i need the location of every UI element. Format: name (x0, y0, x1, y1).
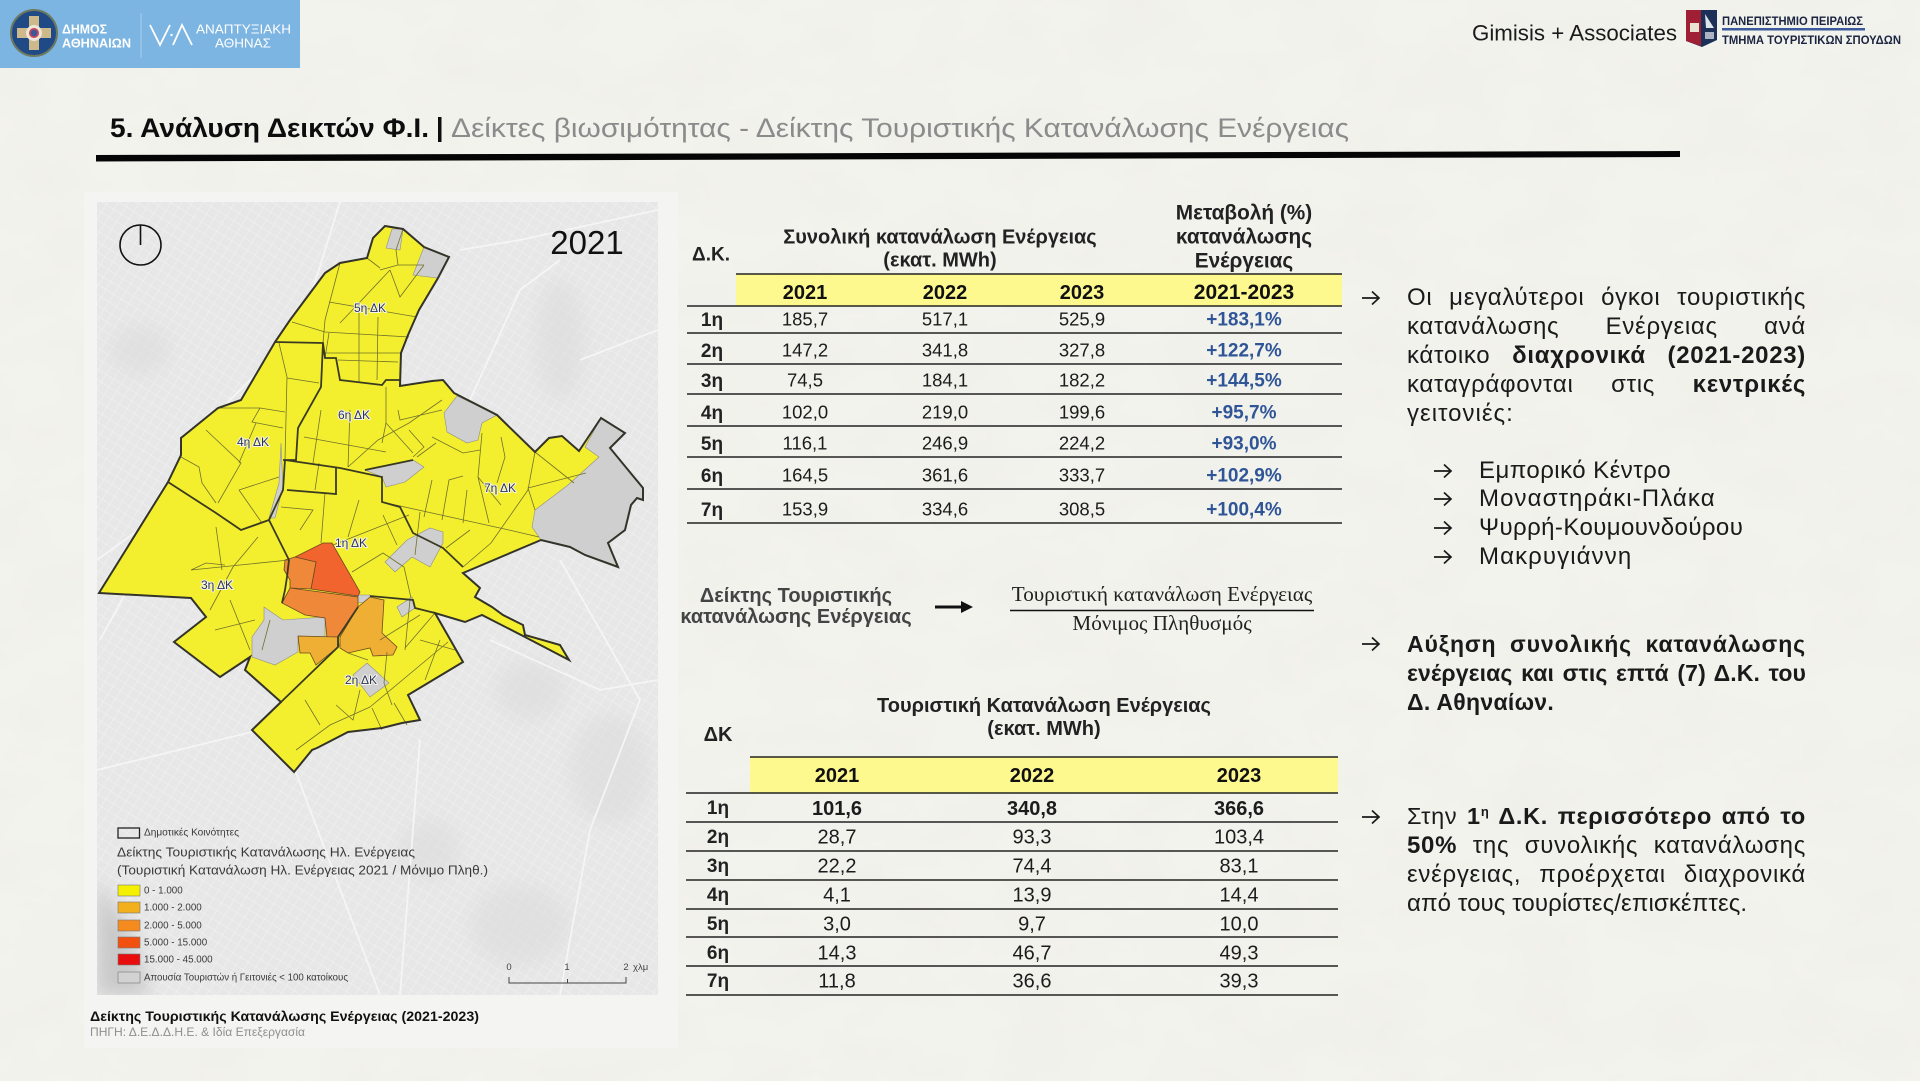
legend: 2.000 - 5.000 (144, 920, 202, 932)
table: total energy consumption: 185,7 (782, 308, 828, 330)
table: total energy consumption: 219,0 (922, 402, 968, 422)
table: total energy consumption: 334,6 (922, 498, 968, 520)
legend: Δείκτης Τουριστικής Κατανάλωσης Ηλ. Ενέργειας (117, 844, 415, 860)
table: total energy consumption: 341,8 (922, 340, 968, 360)
table: tourist energy consumption: 3η (707, 856, 729, 877)
table: tourist energy consumption: 2021 (815, 765, 859, 787)
text block: increase in all seven communities (1407, 631, 1806, 715)
icon: north arrow (120, 225, 161, 265)
table: tourist energy consumption: 366,6 (1214, 798, 1264, 820)
map year: 2021 (550, 224, 624, 261)
table: total energy consumption: 5η (701, 434, 723, 455)
table: total energy consumption: +93,0% (1212, 434, 1277, 454)
logo text: Dimos Athinaion (62, 22, 131, 50)
scale bar: χλμ (633, 962, 648, 973)
table: total energy consumption: 327,8 (1059, 340, 1105, 360)
legend: Απουσία Τουριστών ή Γειτονιές < 100 κατοίκους (144, 972, 348, 984)
table: total energy consumption: 7η (701, 500, 723, 521)
table: tourist energy consumption: 14,4 (1220, 884, 1258, 906)
table: tourist energy consumption: 1η (707, 798, 729, 819)
university text: ΤΜΗΜΑ ΤΟΥΡΙΣΤΙΚΩΝ ΣΠΟΥΔΩΝ (1722, 35, 1901, 47)
text: καταγράφονται στις κεντρικές (1407, 371, 1806, 398)
legend (117, 828, 488, 984)
table heading: Τουριστική Κατανάλωση Ενέργειας (877, 695, 1211, 717)
text: κατανάλωσης Ενέργειας ανά (1407, 313, 1806, 340)
district labels (201, 301, 516, 687)
logo text: Anaptyxiaki Athinas (196, 22, 291, 50)
formula: tourist energy index: κατανάλωσης Ενέργειας (680, 606, 912, 628)
district boundaries (168, 342, 463, 703)
table: total energy consumption: 2η (701, 341, 723, 362)
text: Δ. Αθηναίων. (1407, 689, 1554, 715)
table heading: ΔΚ (704, 724, 733, 746)
table: tourist energy consumption: 9,7 (1018, 914, 1046, 936)
legend: Δημοτικές Κοινότητες (144, 828, 239, 838)
formula: tourist energy index (680, 582, 1314, 635)
table: total energy consumption: +183,1% (1206, 310, 1282, 330)
table: tourist energy consumption: 28,7 (818, 826, 856, 848)
table: total energy consumption: 2023 (1060, 282, 1104, 304)
table heading (704, 695, 1211, 746)
title: Δείκτες βιωσιμότητας - Δείκτης Τουριστικής Κατανάλωσης Ενέργειας (451, 113, 1349, 143)
table: total energy consumption: 147,2 (782, 340, 828, 360)
table: tourist energy consumption: 13,9 (1013, 884, 1051, 906)
text: ενέργειας και στις επτά (7) Δ.Κ. του (1407, 660, 1806, 686)
table: total energy consumption: +122,7% (1206, 340, 1282, 362)
text: από τους τουρίστες/επισκέπτες. (1407, 890, 1747, 917)
table: tourist energy consumption: 14,3 (818, 942, 856, 964)
scale bar (506, 962, 648, 983)
table heading: Μεταβολή (%) (1176, 202, 1312, 224)
neighbourhood boundaries (181, 229, 586, 750)
table: tourist energy consumption: 5η (707, 914, 729, 935)
table: tourist energy consumption: 101,6 (812, 798, 862, 820)
text: 50% της συνολικής κατανάλωσης (1407, 832, 1806, 859)
text: Μοναστηράκι-Πλάκα (1479, 485, 1716, 512)
text: Εμπορικό Κέντρο (1479, 457, 1671, 484)
table: total energy consumption: 2021-2023 (1194, 281, 1294, 304)
scale bar: 1 (564, 962, 570, 973)
table: total energy consumption: 4η (701, 403, 723, 424)
list: central neighbourhoods (1479, 457, 1743, 570)
text block: largest volumes per resident (1407, 284, 1806, 427)
table: tourist energy consumption: 7η (707, 971, 729, 992)
table: total energy consumption: 517,1 (922, 308, 968, 330)
high index central neighbourhoods (282, 543, 397, 665)
logo text: Anaptyxiaki Athinas: ΑΘΗΝΑΣ (215, 36, 271, 50)
table: tourist energy consumption: 83,1 (1220, 856, 1258, 878)
legend: 1.000 - 2.000 (144, 902, 202, 914)
icon: university shield (1686, 10, 1717, 47)
outer boundary (99, 226, 643, 772)
table: total energy consumption: 6η (701, 466, 723, 487)
table: total energy consumption: 1η (701, 310, 723, 331)
text: Μακρυγιάννη (1479, 543, 1632, 570)
table: tourist energy consumption: 2023 (1217, 765, 1261, 787)
table: tourist energy consumption: 103,4 (1214, 826, 1264, 848)
table: tourist energy consumption: 22,2 (818, 856, 856, 878)
table: total energy consumption: 184,1 (922, 370, 968, 390)
table: total energy consumption: 224,2 (1059, 432, 1105, 454)
scale bar: 2 (623, 962, 629, 973)
table: total energy consumption: +144,5% (1206, 370, 1282, 392)
table heading: (εκατ. MWh) (987, 718, 1101, 740)
text: Ψυρρή-Κουμουνδούρου (1479, 514, 1743, 541)
text: Στην 1η Δ.Κ. περισσότερο από το (1407, 803, 1806, 829)
title: 5. Ανάλυση Δεικτών Φ.Ι. (110, 113, 429, 143)
table: tourist energy consumption: 11,8 (818, 970, 856, 992)
table: total energy consumption: 74,5 (787, 370, 823, 390)
university text: ΠΑΝΕΠΙΣΤΗΜΙΟ ΠΕΙΡΑΙΩΣ (1722, 16, 1863, 28)
scale bar: 0 (506, 962, 512, 973)
table: total energy consumption: 2021 (783, 282, 827, 304)
table heading (692, 202, 1312, 272)
header logo: Municipality of Athens and Development Agency (0, 0, 300, 68)
table: tourist energy consumption: 6η (707, 943, 729, 964)
table heading: Ενέργειας (1195, 250, 1293, 272)
no-tourist grey neighbourhoods (252, 229, 643, 697)
table: tourist energy consumption: 36,6 (1013, 970, 1051, 992)
table: tourist energy consumption: 3,0 (823, 914, 851, 936)
district labels: 6η ΔΚ (338, 408, 370, 422)
table heading: Συνολική κατανάλωση Ενέργειας (783, 226, 1097, 248)
table: total energy consumption: 3η (701, 371, 723, 392)
table: tourist energy consumption: 46,7 (1013, 942, 1051, 964)
formula: tourist energy index: Μόνιμος Πληθυσμός (1072, 611, 1252, 635)
district labels: 4η ΔΚ (237, 435, 269, 449)
logo: University of Piraeus (1686, 10, 1901, 47)
table: total energy consumption: 333,7 (1059, 464, 1105, 486)
table: total energy consumption: +100,4% (1206, 500, 1282, 520)
formula: tourist energy index: Τουριστική κατανάλωση Ενέργειας (1012, 582, 1313, 606)
district labels: 1η ΔΚ (335, 536, 367, 550)
text: γειτονιές: (1407, 400, 1514, 427)
table: tourist energy consumption: 74,4 (1013, 856, 1051, 878)
district labels: 2η ΔΚ (345, 673, 377, 687)
icon: bullet arrows (1362, 292, 1451, 824)
district labels: 3η ΔΚ (201, 578, 233, 592)
legend: 15.000 - 45.000 (144, 954, 213, 966)
table: tourist energy consumption: 4,1 (823, 884, 851, 906)
table: total energy consumption: 164,5 (782, 464, 828, 486)
map of Athens tourist energy index 2021 (97, 202, 658, 995)
district labels: 7η ΔΚ (484, 481, 516, 495)
legend: 0 - 1.000 (144, 886, 183, 896)
table: tourist energy consumption: 2022 (1010, 765, 1054, 787)
table: tourist energy consumption (686, 695, 1338, 995)
table: total energy consumption: 525,9 (1059, 308, 1105, 330)
table heading: Δ.Κ. (692, 244, 730, 266)
table: total energy consumption: 361,6 (922, 464, 968, 486)
table: total energy consumption: 182,2 (1059, 370, 1105, 390)
panel: map figure (84, 192, 678, 1048)
arrow (935, 601, 973, 613)
text block: first community share (1407, 803, 1806, 917)
university text (1722, 16, 1901, 47)
text: Οι μεγαλύτεροι όγκοι τουριστικής (1407, 284, 1806, 311)
table: total energy consumption: 246,9 (922, 432, 968, 454)
table: total energy consumption: 308,5 (1059, 498, 1105, 520)
table heading: κατανάλωσης (1176, 226, 1312, 248)
table: tourist energy consumption: 93,3 (1013, 826, 1051, 848)
table: tourist energy consumption: 39,3 (1220, 970, 1258, 992)
district labels: 5η ΔΚ (354, 301, 386, 315)
table: total energy consumption: 102,0 (782, 402, 828, 422)
legend: (Τουριστική Κατανάλωση Ηλ. Ενέργειας 2021 / Μόνιμο Πληθ.) (117, 862, 488, 878)
table: total energy consumption: +95,7% (1212, 402, 1277, 424)
legend: 5.000 - 15.000 (144, 938, 208, 948)
text: ενέργειας, προέρχεται διαχρονικά (1407, 861, 1806, 888)
table: tourist energy consumption: 4η (707, 885, 729, 906)
table: tourist energy consumption: 2η (707, 827, 729, 848)
logo text: Dimos Athinaion: ΑΘΗΝΑΙΩΝ (62, 36, 131, 50)
logo text: Dimos Athinaion: ΔΗΜΟΣ (62, 22, 107, 36)
text: Αύξηση συνολικής κατανάλωσης (1407, 631, 1806, 657)
table heading: (εκατ. MWh) (883, 250, 997, 272)
icon: VA monogram (150, 25, 192, 45)
table: total energy consumption: 199,6 (1059, 402, 1105, 422)
municipal districts outline fill (99, 226, 643, 772)
table: tourist energy consumption: 49,3 (1220, 942, 1258, 964)
table: tourist energy consumption: 10,0 (1220, 914, 1258, 936)
table: total energy consumption: +102,9% (1206, 466, 1282, 486)
icon: municipality emblem (11, 10, 57, 56)
header text: Gimisis + Associates: Gimisis + Associates (1472, 20, 1677, 46)
figure caption (90, 1009, 479, 1039)
logo text: Anaptyxiaki Athinas: ΑΝΑΠΤΥΞΙΑΚΗ (196, 22, 291, 36)
figure caption: ΠΗΓΗ: Δ.Ε.Δ.Δ.Η.Ε. & Ιδία Επεξεργασία (90, 1025, 305, 1039)
table: tourist energy consumption: 340,8 (1007, 798, 1057, 820)
table: total energy consumption: 153,9 (782, 498, 828, 520)
table: total energy consumption: 116,1 (783, 432, 827, 454)
figure caption: Δείκτης Τουριστικής Κατανάλωσης Ενέργειας (2021-2023) (90, 1009, 479, 1024)
text: κάτοικο διαχρονικά (2021-2023) (1407, 342, 1806, 369)
formula: tourist energy index: Δείκτης Τουριστικής (700, 585, 892, 607)
table: total energy consumption: 2022 (923, 282, 967, 304)
title (110, 113, 1349, 143)
table: total energy consumption (687, 202, 1342, 523)
